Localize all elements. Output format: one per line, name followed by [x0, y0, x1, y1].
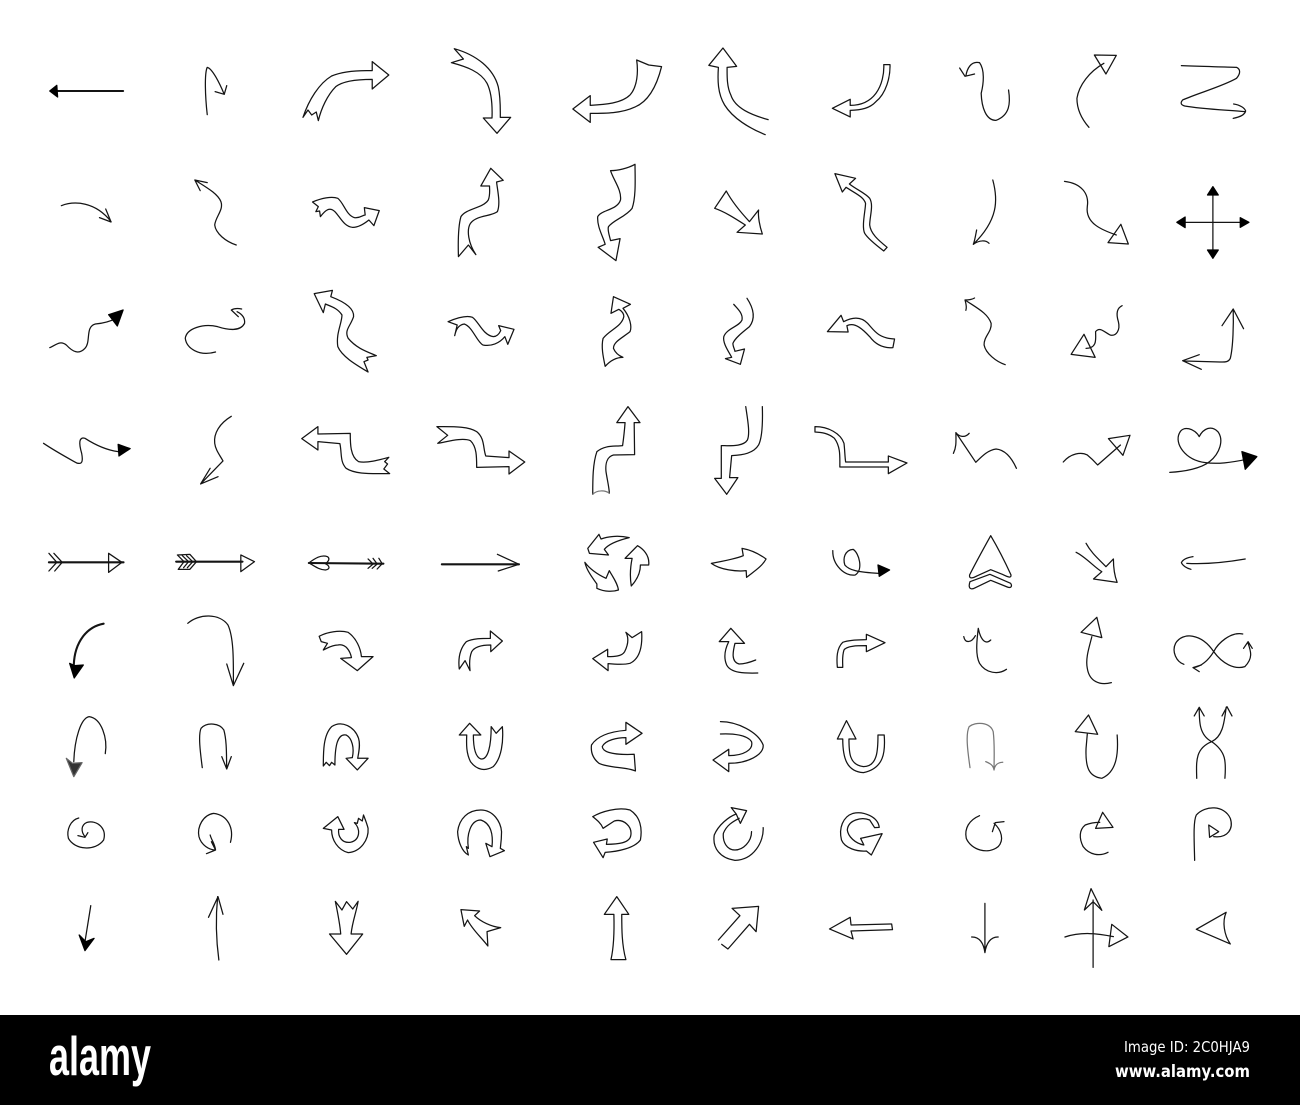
icon: wave outline arrow left	[827, 315, 895, 348]
icon: wavy narrow arrow up-left	[835, 174, 887, 251]
icon: long straight arrow	[442, 554, 519, 571]
icon: u-turn outline arrow	[323, 724, 368, 770]
icon: swoosh outline arrow	[711, 548, 766, 577]
icon: curved open arrow up	[709, 48, 768, 135]
icon: u-shaped outline arrow up	[459, 723, 503, 769]
icon: peak triangle arrow	[1063, 435, 1130, 465]
icon: curved outline arrow left	[573, 60, 662, 122]
icon: hooked thin arrow	[205, 67, 227, 115]
icon: zigzag black head arrow	[44, 438, 130, 463]
icon: hook long arrow down	[188, 616, 244, 686]
icon: c-shaped outline arrow right	[591, 722, 642, 771]
arrow rows 8-9, left half	[68, 809, 641, 960]
icon: curve triangle arrow up	[1081, 617, 1111, 684]
icon: wavy outline arrow down	[598, 164, 635, 261]
icon: curved outline arrow down	[319, 631, 373, 671]
icon: small wavy outline arrow	[448, 317, 514, 345]
icon: short black head arrow down	[79, 906, 94, 951]
icon: wavy line with triangle head	[1064, 181, 1128, 244]
arrow rows 8-9, right half	[714, 808, 1231, 967]
icon: crown-tail arrow down	[330, 901, 363, 954]
icon: four-way cross arrows	[1177, 187, 1249, 258]
icon: loop black head arrow	[833, 549, 890, 576]
icon: spiral arrow	[68, 818, 104, 848]
icon: curved outline arrow right	[459, 631, 502, 671]
icon: wavy outline arrow up	[602, 297, 631, 366]
icon: s-curve thin arrow	[960, 62, 1009, 120]
icon: zigzag arrow	[1181, 66, 1246, 118]
icon: large wavy outline arrow	[314, 290, 376, 372]
website address: www.alamy.com	[1115, 1062, 1250, 1082]
icon: wavy thin arrow up-left	[965, 298, 1005, 365]
icon: short open arrow down-right	[1076, 543, 1117, 582]
icon: thick left arrow	[50, 85, 123, 97]
icon: p-shaped arrow	[1194, 808, 1231, 860]
icon: tall outline arrow up	[604, 897, 629, 960]
icon: fletched arrow with triangle head	[49, 553, 124, 572]
icon: crossed up and right arrows	[1065, 889, 1128, 967]
icon: u-shape triangle arrow	[1075, 715, 1118, 778]
icon: c-loop outline arrow left	[593, 809, 641, 858]
icon: curved outline arrow left	[593, 632, 642, 671]
icon: stepped outline arrow left	[302, 427, 390, 474]
icon: circular thin arrow	[199, 813, 232, 854]
icon: straight outline arrow up-right	[718, 906, 759, 949]
icon: squiggle black head arrow	[50, 310, 123, 352]
icon: thin arrow left	[1181, 557, 1245, 569]
icon: long curve arrow down	[973, 180, 996, 244]
icon: wide u-turn arrow left	[713, 722, 763, 772]
icon: triangle pointer left	[1196, 912, 1230, 944]
icon: wavy outline arrow right	[313, 197, 379, 227]
arrow rows 3-4, right half	[715, 298, 1257, 494]
icon: u-turn faint arrow	[967, 723, 1003, 770]
icon: horseshoe outline arrow	[458, 810, 504, 857]
icon: three circular arrows	[585, 534, 649, 591]
icon: arrow down with curved barbs	[972, 903, 998, 953]
icon: curve with black head	[70, 624, 104, 678]
icon: heart-tip arrow	[309, 556, 383, 570]
icon: c-curve triangle arrow	[1080, 812, 1113, 855]
icon: straight outline arrow left	[829, 917, 892, 939]
icon: short outline arrow down-right	[715, 191, 762, 234]
icon: heart loop arrow	[1170, 428, 1257, 472]
icon: wavy open arrow down	[724, 298, 753, 364]
footer logo: alamy	[49, 1025, 151, 1087]
arrow rows 1-2, right half	[709, 48, 1249, 258]
icon: navigation arrow with chevron	[969, 536, 1011, 589]
icon: narrow curved arrow left	[832, 65, 890, 117]
icon: stepped outline arrow right	[437, 427, 525, 474]
icon: short curved arrow	[61, 203, 111, 222]
icon: u-turn gray head arrow	[66, 717, 106, 777]
icon: g-shaped circular arrow	[841, 813, 882, 855]
arrow rows 5-7, left half	[49, 534, 649, 777]
icon: infinity arrow	[1174, 634, 1252, 672]
icon: curved outline arrow down	[451, 49, 511, 133]
icon: short outline arrow up-left	[461, 910, 501, 946]
icon: stepped outline arrow up	[593, 407, 640, 494]
icon: stepped open arrow down	[715, 407, 763, 494]
icon: arrow with chevron fletching	[176, 554, 255, 572]
icon: circular outline arrow	[323, 815, 368, 853]
icon: looped thin arrow	[185, 309, 245, 353]
icon: thin long arrow up	[208, 897, 223, 960]
arrow rows 5-7, right half	[711, 536, 1252, 778]
icon: corner double arrow	[1183, 309, 1244, 369]
icon: u-shaped narrow arrow up	[837, 721, 885, 773]
icon: wavy thin arrow up-left	[195, 180, 236, 245]
icon: curved outline arrow right	[303, 62, 389, 121]
icon: squiggle triangle arrow	[1071, 306, 1122, 357]
icon: thin circle arrow	[966, 816, 1004, 851]
footer bar	[0, 1015, 1300, 1105]
icon: bent narrow arrow right	[837, 634, 885, 667]
icon: peak thin arrow	[953, 433, 1016, 468]
icon: hook open arrow up	[719, 628, 758, 673]
arrow rows 3-4, left half	[44, 290, 640, 494]
arrow rows 1-2, left half	[50, 49, 662, 261]
icon: open circular arrow	[714, 808, 763, 860]
icon: curve with triangle head	[1077, 55, 1116, 127]
icon: wavy outline arrow up	[458, 168, 503, 257]
icon: u-turn thin arrow	[200, 724, 231, 769]
icon: hook thin arrow up	[964, 628, 1006, 673]
icon: bent thin arrow down-left	[201, 416, 231, 484]
icon: crossed double arrows	[1194, 707, 1232, 778]
icon: bent narrow arrow right	[815, 427, 907, 474]
image id: Image ID: 2C0HJA9	[1124, 1038, 1250, 1056]
